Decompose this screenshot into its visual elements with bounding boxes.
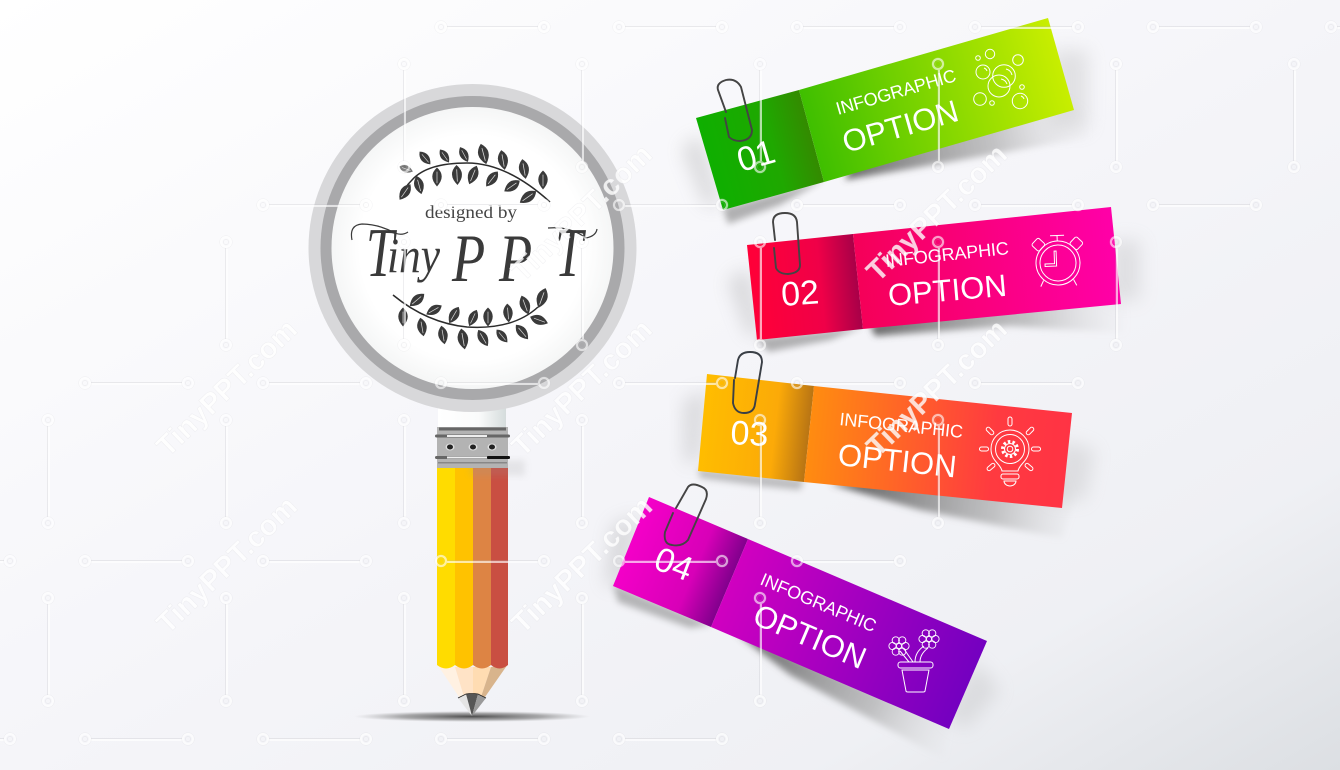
logo: TinyPPT script: T [366,215,397,292]
logo: designed by: designed by [425,202,517,222]
heading: infographic 04: INFOGRAPHIC [757,569,879,636]
icon: bubbles [974,49,1028,109]
number 01: 01 [733,133,780,180]
watermarks: TinyPPT.com [506,139,659,288]
heading: option 01: OPTION [838,93,962,160]
panel: option 01 [682,18,1088,224]
logo: TinyPPT script: T [555,215,586,292]
paperclip 01 [718,80,752,141]
watermarks: TinyPPT.com [151,314,304,463]
card 04 left flap [613,497,748,627]
pencil body stripes [437,468,508,668]
pencil ferrule [435,427,525,476]
icon: light bulb with gear [980,417,1040,486]
logo: TinyPPT script [351,215,597,296]
card 02 right panel [853,207,1121,329]
card 01 right panel [799,18,1074,182]
pencil wood tip [437,664,508,697]
magnifier lens [332,107,614,389]
paperclip 04 [665,484,707,545]
pencil graphite point [458,694,486,716]
number 04: 04 [649,540,698,589]
ground shadow under pencil [354,711,590,722]
number 02: 02 [780,273,820,314]
paperclip 02 [773,213,800,274]
watermarks [151,139,1014,640]
logo: TinyPPT script: iny [387,227,441,283]
panel: option 04 [605,484,1000,760]
logo: lower laurel [393,286,551,350]
logo: upper laurel [396,142,550,207]
card 03 shadows [684,390,1095,538]
card 01 left flap [696,90,824,210]
heading: infographic 03: INFOGRAPHIC [839,409,964,442]
number 03: 03 [730,414,769,454]
card 04 right panel [711,539,987,729]
logo: TinyPPT script: P [498,221,532,296]
card 04 shadows [605,515,1000,760]
heading: infographic 02: INFOGRAPHIC [884,238,1010,271]
magnifier inner ring [320,96,624,400]
card 03 left flap [698,374,814,482]
icon: flower pot [889,630,939,692]
watermarks: TinyPPT.com [506,491,659,640]
heading: infographic 01: INFOGRAPHIC [834,65,958,119]
watermarks: TinyPPT.com [506,314,659,463]
heading: option 03: OPTION [836,437,958,484]
card 02 left flap [747,234,863,340]
heading: option 02: OPTION [887,268,1008,313]
panel: option 02 [728,207,1140,352]
heading: option 04: OPTION [748,597,871,676]
card 01 shadows [682,50,1088,224]
panel: option 03 [684,352,1095,538]
logo: TinyPPT script: P [451,221,485,296]
paperclip 03 [733,352,762,413]
magnifier outer ring [308,84,636,412]
pencil neck [438,403,506,429]
pencil [435,403,525,716]
magnifier [308,84,636,412]
watermarks: TinyPPT.com [861,314,1014,463]
card 03 right panel [804,386,1072,508]
watermarks: TinyPPT.com [861,139,1014,288]
watermarks: TinyPPT.com [151,491,304,640]
icon: alarm clock [1031,235,1085,287]
card 02 shadows [728,240,1140,352]
